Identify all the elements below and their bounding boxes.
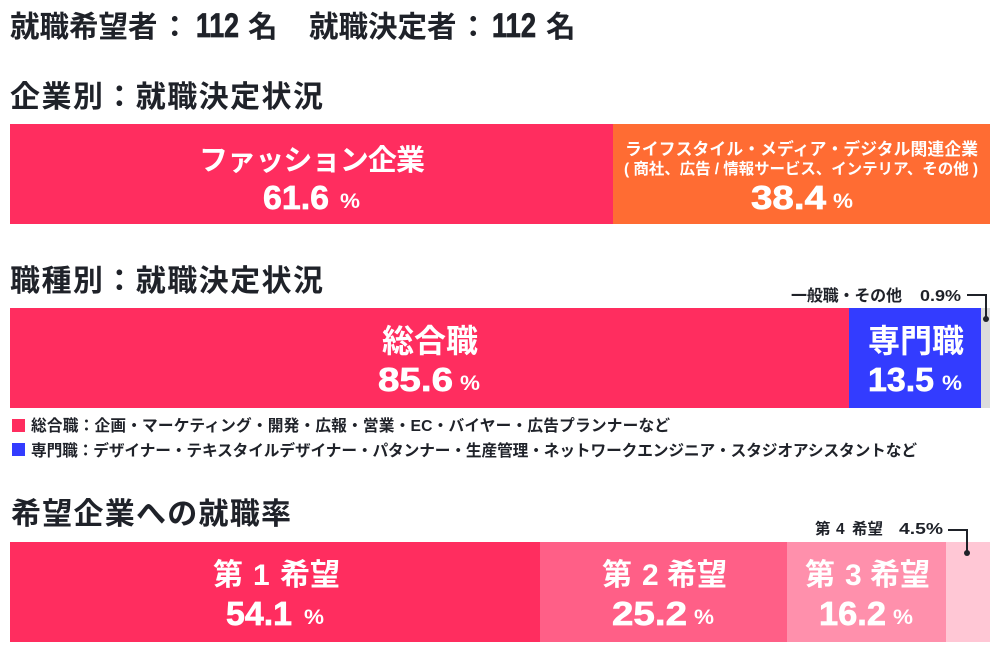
segment: first choice: 希望 bbox=[280, 559, 340, 592]
callout: general and other 0.9% bbox=[791, 287, 989, 322]
title: applicants and placements: 112 bbox=[492, 7, 536, 45]
callout: fourth choice 4.5%: 4 bbox=[836, 521, 845, 538]
title: applicants and placements: 就職決定者 bbox=[309, 11, 457, 44]
segment: second choice: % bbox=[694, 606, 714, 629]
callout: fourth choice 4.5%: 第 bbox=[815, 519, 831, 538]
segment: fashion companies: 61.6 bbox=[263, 179, 329, 216]
legend: specialist track roles: 専門職：デザイナー・テキスタイルデザイナー・パタンナー・生産管理・ネットワークエンジニア・スタジオアシスタントなど bbox=[31, 441, 917, 460]
segment: third choice bbox=[787, 542, 946, 642]
title: applicants and placements: ： bbox=[160, 11, 190, 44]
segment: first choice: 54.1 bbox=[226, 595, 292, 632]
heading: placement rate by preference: 希望企業への就職率 bbox=[11, 498, 291, 531]
title: applicants and placements: ： bbox=[458, 11, 488, 44]
heading: placement by job type: 職種別：就職決定状況 bbox=[10, 265, 323, 298]
segment: first choice: 1 bbox=[253, 559, 270, 592]
segment: fashion companies: ファッション企業 bbox=[199, 144, 425, 177]
segment: fourth choice bbox=[946, 542, 990, 642]
segment: lifestyle, media, digital: ( 商社、広告 / 情報サービス、インテリア、その他 ) bbox=[624, 159, 978, 178]
segment: second choice: 25.2 bbox=[612, 595, 687, 632]
callout: general and other 0.9%: 0.9% bbox=[920, 288, 961, 305]
segment: first choice bbox=[10, 542, 540, 642]
segment: specialist track: 13.5 bbox=[868, 361, 934, 398]
segment: third choice: % bbox=[893, 606, 913, 629]
segment: specialist track: 専門職 bbox=[868, 323, 964, 359]
segment: first choice: % bbox=[304, 606, 324, 629]
legend: career track roles: 総合職：企画・マーケティング・開発・広報・営業・EC・バイヤー・広告プランナーなど bbox=[31, 416, 670, 435]
title: applicants and placements: 就職希望者 bbox=[10, 11, 158, 44]
segment: specialist track: % bbox=[942, 372, 962, 395]
segment: lifestyle, media, digital: 38.4 bbox=[751, 179, 827, 216]
segment: third choice: 3 bbox=[845, 559, 862, 592]
segment: second choice: 第 bbox=[602, 559, 632, 592]
segment: third choice: 16.2 bbox=[819, 595, 886, 632]
title: applicants and placements bbox=[10, 7, 576, 45]
segment: career track: % bbox=[460, 372, 480, 395]
stacked bar: choice preference bbox=[10, 542, 990, 642]
segment: specialist track bbox=[849, 308, 981, 408]
segment: second choice: 希望 bbox=[667, 559, 727, 592]
callout: fourth choice 4.5%: 4.5% bbox=[899, 521, 943, 538]
title: applicants and placements: 名 bbox=[546, 11, 576, 44]
heading: placement by company: 企業別：就職決定状況 bbox=[10, 81, 323, 114]
title: applicants and placements: 名 bbox=[248, 11, 278, 44]
stacked bar: company type bbox=[10, 124, 990, 224]
stacked bar: job type bbox=[10, 308, 990, 408]
segment: first choice: 第 bbox=[213, 559, 243, 592]
title: applicants and placements: 112 bbox=[196, 7, 239, 45]
segment: third choice: 希望 bbox=[870, 559, 930, 592]
segment: fashion companies bbox=[10, 124, 613, 224]
segment: lifestyle, media, digital: % bbox=[833, 190, 853, 213]
callout: general and other 0.9%: 一般職・その他 bbox=[791, 287, 902, 305]
segment: second choice bbox=[540, 542, 787, 642]
segment: career track bbox=[10, 308, 849, 408]
segment: fashion companies: % bbox=[340, 190, 360, 213]
segment: lifestyle, media, digital: ライフスタイル・メディア・デジタル関連企業 bbox=[625, 139, 978, 159]
segment: general and other bbox=[981, 308, 990, 408]
segment: career track: 85.6 bbox=[378, 361, 453, 398]
segment: lifestyle, media, digital bbox=[613, 124, 990, 224]
segment: career track: 総合職 bbox=[382, 323, 478, 359]
callout: fourth choice 4.5%: 希望 bbox=[852, 519, 883, 538]
segment: third choice: 第 bbox=[805, 559, 835, 592]
callout: fourth choice 4.5% bbox=[815, 519, 970, 556]
segment: second choice: 2 bbox=[642, 559, 659, 592]
